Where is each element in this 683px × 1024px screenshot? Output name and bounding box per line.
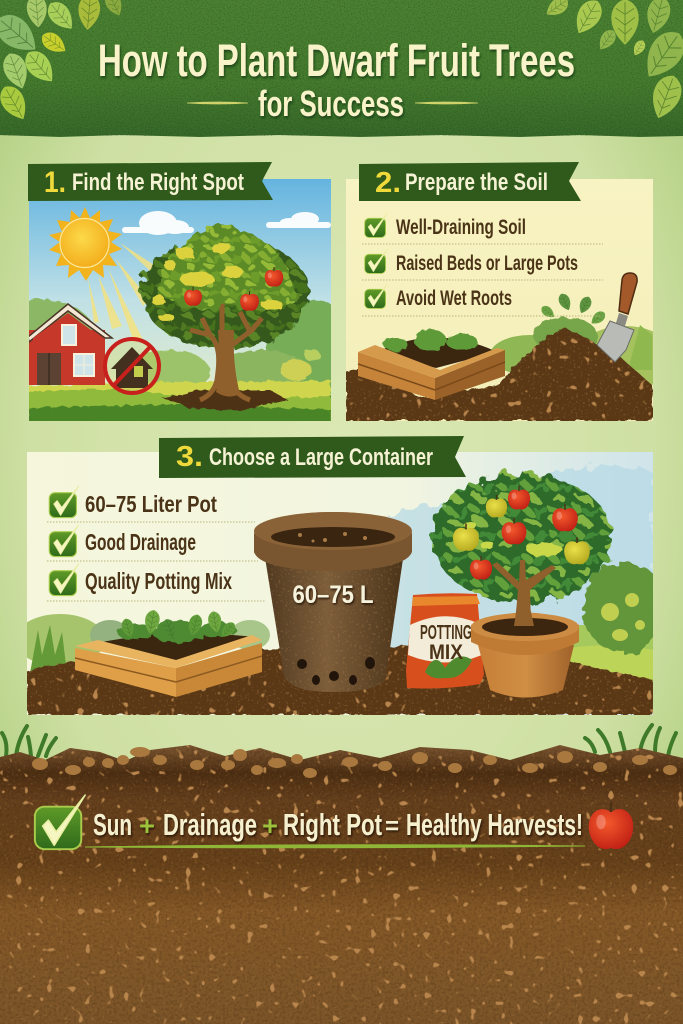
illustration: fruit on tree xyxy=(453,486,590,580)
illustration: hills and bushes xyxy=(29,298,331,394)
leaves: top right corner xyxy=(542,0,683,123)
text: avoid wet roots: Avoid Wet Roots xyxy=(396,287,512,310)
banner: step 3 xyxy=(159,436,466,478)
soil band xyxy=(0,745,683,1024)
icon: check 2 xyxy=(49,525,79,557)
icon: no house sign xyxy=(105,339,159,393)
illustration: sun rays xyxy=(88,243,153,342)
icon: apple xyxy=(589,802,633,849)
banner: step 2: 2. xyxy=(375,167,401,199)
banner: step 1: 1. xyxy=(44,166,66,199)
tagline text: Healthy Harvests! xyxy=(406,807,583,842)
text: raised beds: Raised Beds or Large Pots xyxy=(396,252,578,275)
illustration: large pot xyxy=(254,512,412,692)
illustration: background shrubs xyxy=(490,294,653,385)
underline xyxy=(85,845,585,848)
illustration: soil ground xyxy=(27,645,653,715)
illustration: red house xyxy=(28,304,112,385)
illustration: grass ground xyxy=(29,380,331,421)
icon: check 3 xyxy=(49,564,79,596)
text: pot size: 60–75 Liter Pot xyxy=(85,491,217,517)
illustration: potting mix bag xyxy=(406,593,484,688)
banner: step 2 xyxy=(359,162,581,201)
tagline text: Right Pot xyxy=(283,807,382,842)
illustration: clouds xyxy=(122,211,331,235)
banner: step 1: Find the Right Spot xyxy=(72,169,244,196)
illustration: raised bed xyxy=(358,329,505,400)
icon: check 3 xyxy=(365,284,387,308)
text: pot volume: 60–75 L xyxy=(292,581,374,609)
tagline text: + xyxy=(262,811,278,841)
tagline text: + xyxy=(139,811,155,841)
illustration: potting mix bag: POTTING xyxy=(420,622,472,644)
illustration: sun xyxy=(49,207,122,281)
crust pebbles xyxy=(32,747,677,778)
banner: step 3: Choose a Large Container xyxy=(209,444,433,471)
banner: step 2: Prepare the Soil xyxy=(405,169,548,196)
header band xyxy=(0,0,683,137)
illustration: soil ground xyxy=(346,328,653,421)
text: good drainage: Good Drainage xyxy=(85,529,196,555)
illustration: distant greenery xyxy=(15,562,667,690)
title: for Success xyxy=(258,83,404,124)
tagline text: Sun xyxy=(93,807,132,842)
illustration: apples on tree xyxy=(184,267,283,311)
tagline text: Drainage xyxy=(163,807,257,842)
title xyxy=(98,35,575,124)
checklist: step 2 xyxy=(362,213,603,316)
illustration: terracotta pot xyxy=(471,598,579,698)
illustration: sky wash xyxy=(360,465,653,650)
grass tufts xyxy=(2,725,676,756)
icon: check 1 xyxy=(49,486,79,518)
illustration: potting mix bag: MIX xyxy=(429,641,463,664)
icon: check 2 xyxy=(365,249,387,273)
tagline text: = xyxy=(385,813,399,840)
text: quality potting mix: Quality Potting Mix xyxy=(85,568,232,594)
tagline strip xyxy=(35,795,633,849)
panel: choose a large container xyxy=(15,452,667,715)
tagline text xyxy=(93,807,583,842)
illustration: tree xyxy=(141,227,309,411)
icon: big check xyxy=(35,795,85,849)
banner: step 1 xyxy=(28,162,273,201)
text: well-draining soil: Well-Draining Soil xyxy=(396,216,526,239)
checklist: step 3 xyxy=(47,486,265,601)
panel: find the right spot xyxy=(29,179,331,421)
leaves: top left corner xyxy=(0,0,126,125)
illustration: raised bed xyxy=(75,609,262,697)
icon: check 1 xyxy=(365,213,387,237)
illustration: dwarf fruit tree xyxy=(432,473,612,624)
panel: prepare the soil xyxy=(346,179,675,421)
icon: trowel xyxy=(597,273,637,362)
banner: step 3: 3. xyxy=(176,441,203,473)
